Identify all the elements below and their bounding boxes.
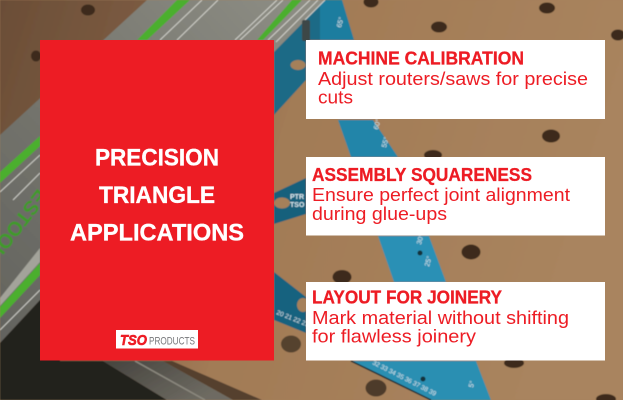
text block: Mark material without shifting [312,307,569,328]
title: APPLICATIONS [70,220,244,246]
ruler markings: 30° [415,233,426,246]
panel: layout for joinery [306,282,605,360]
text block [312,184,570,224]
ruler markings: 55° [380,136,391,149]
panel: red title panel [40,40,274,360]
text block [318,68,588,108]
ruler markings: 32 33 34 35 36 37 38 39 [371,360,437,398]
ruler markings: 5° [467,380,477,389]
panel: assembly squareness [306,157,605,236]
heading: MACHINE CALIBRATION [318,48,524,68]
icon: guide rail [0,0,325,343]
text block: during glue-ups [312,203,447,224]
panel: machine calibration [306,40,605,119]
ruler markings: 65° [335,16,346,29]
heading: LAYOUT FOR JOINERY [312,288,502,308]
icon: TSO Products logo: PRODUCTS [149,336,195,348]
ruler markings: 25° [423,255,434,268]
ruler markings [275,16,477,398]
text block: Adjust routers/saws for precise [318,68,588,89]
title: TRIANGLE [99,182,215,209]
icon: TSO Products logo: TSO [120,332,147,349]
title: PRECISION [95,144,219,172]
ruler markings: 20 21 22 23 [275,309,310,329]
icon: dark machine area lower left [0,300,262,400]
heading: ASSEMBLY SQUARENESS [312,165,532,185]
title [70,144,244,246]
text block: cuts [318,86,353,108]
text block: for flawless joinery [312,326,477,346]
icon: blue triangle parts [274,0,491,400]
text block: Ensure perfect joint alignment [312,184,570,205]
ruler markings: PTR [290,194,304,201]
text block [312,307,569,346]
ruler markings: TSO [290,202,305,209]
ruler markings: 60° [372,118,383,131]
icon: TSO Products logo [116,330,198,349]
